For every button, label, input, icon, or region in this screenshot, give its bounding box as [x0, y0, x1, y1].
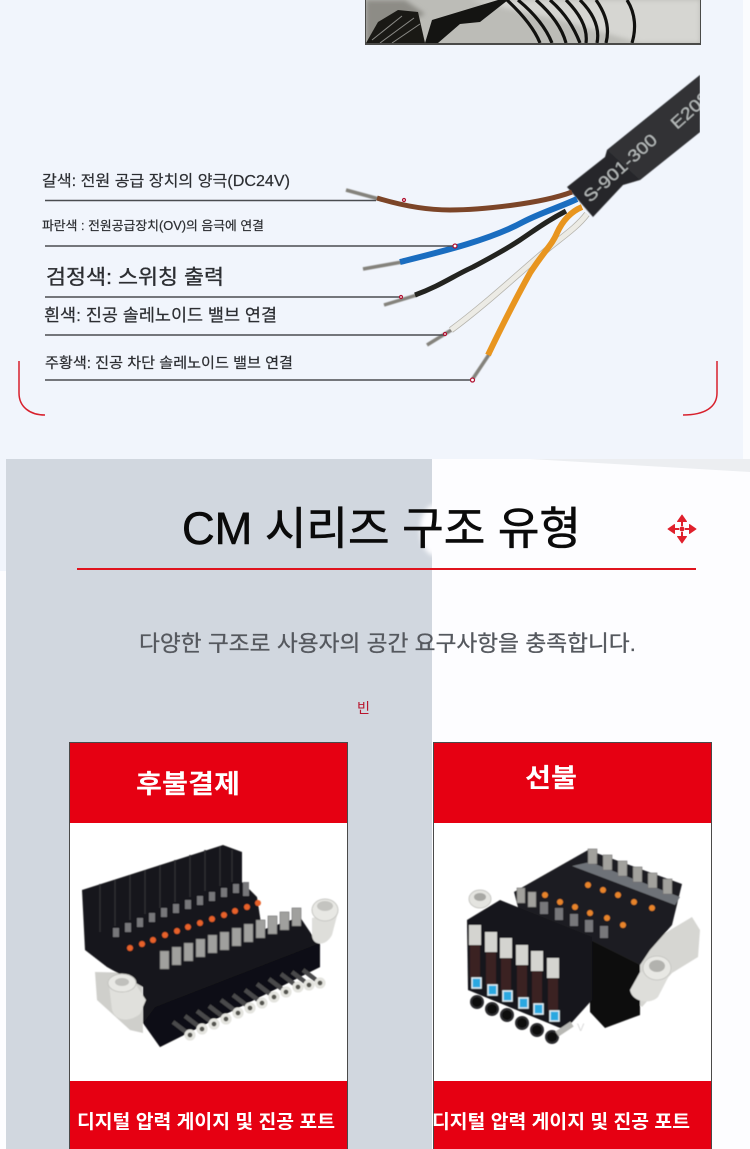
- card footer text: 디지털 압력 게이지 및 진공 포트: [77, 1111, 335, 1133]
- white wire: [451, 214, 587, 330]
- red corner bracket left: [19, 361, 45, 415]
- cable jacket: [567, 75, 714, 217]
- subtitle: 다양한 구조로 사용자의 공간 요구사항을 충족합니다.: [139, 631, 636, 656]
- leader lines: [45, 200, 472, 380]
- card title: 후불결제: [136, 769, 240, 799]
- label: orange: 주황색: 진공 차단 솔레노이드 밸브 연결: [45, 355, 293, 372]
- red corner bracket right: [683, 361, 717, 415]
- label: black: 검정색: 스위칭 출력: [46, 266, 224, 289]
- panel: right product card: [432, 742, 712, 1149]
- cable jacket: S-901-300: [580, 130, 661, 206]
- brown wire: [377, 192, 572, 210]
- icon: red move arrows: [668, 515, 696, 543]
- product photo: manifold with pressure gauges: [467, 849, 700, 1043]
- card header: [70, 743, 347, 823]
- label: white: 흰색: 진공 솔레노이드 밸브 연결: [44, 306, 277, 325]
- label: blue: 파란색 : 전원공급장치(OV)의 음극에 연결: [42, 219, 264, 233]
- label: brown: 갈색: 전원 공급 장치의 양극(DC24V): [42, 172, 290, 190]
- photo: coiled black tubing: [365, 0, 701, 45]
- gray background panel: [6, 459, 432, 1149]
- black wire: [415, 211, 566, 295]
- card footer text: 디지털 압력 게이지 및 진공 포트: [432, 1111, 690, 1133]
- card image area: [434, 823, 711, 1081]
- title: CM 시리즈 구조 유형: [182, 503, 581, 554]
- wire labels: [42, 172, 293, 372]
- product photo: manifold with pressure gauges: V: [577, 1022, 585, 1034]
- orange wire: [488, 207, 582, 355]
- card header: [434, 743, 711, 823]
- cable jacket: E208: [667, 88, 714, 133]
- panel: left product card: [69, 742, 348, 1149]
- cable diagram: [45, 75, 714, 382]
- card image area: [70, 823, 347, 1081]
- rear caps: [113, 882, 249, 937]
- card footer: [434, 1081, 711, 1149]
- bare wire tips: [346, 190, 490, 380]
- card title: 선불: [525, 763, 577, 793]
- small red label: 빈: [357, 700, 370, 716]
- blue wire: [400, 199, 577, 262]
- leader dots: [400, 198, 474, 382]
- top background: [0, 0, 743, 459]
- product photo: manifold with rear connectors: [82, 845, 338, 1047]
- card footer: [70, 1081, 347, 1149]
- second row of caps: [540, 902, 608, 938]
- title underline: [77, 568, 696, 570]
- front caps: [160, 908, 301, 969]
